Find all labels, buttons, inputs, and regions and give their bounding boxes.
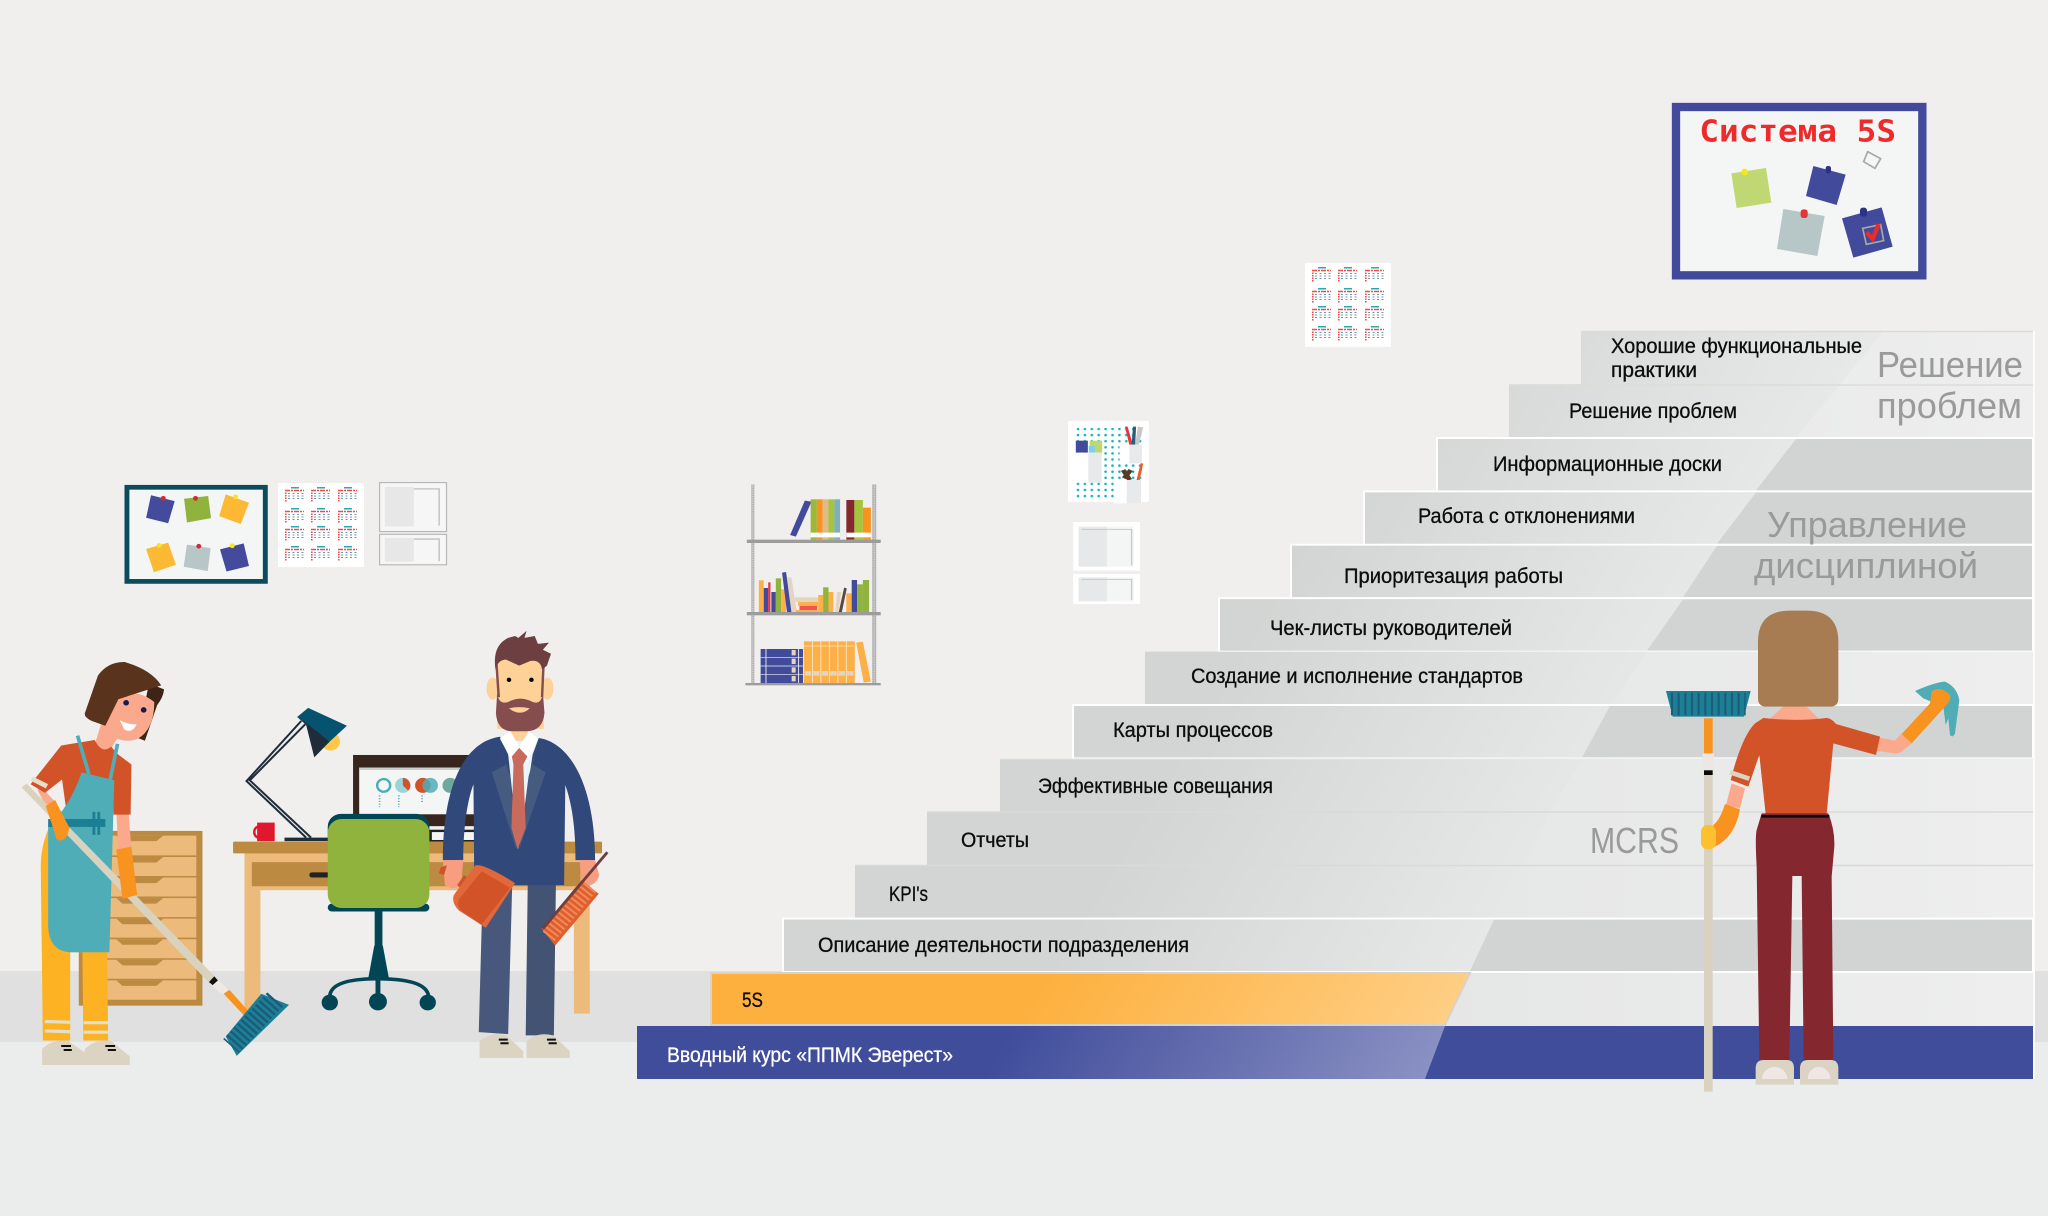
note: blue — [1806, 166, 1846, 205]
step: Работа с отклонениями — [1364, 491, 2033, 545]
right arm — [1877, 733, 1912, 753]
jacket — [443, 737, 595, 885]
legs — [479, 883, 512, 1034]
shoes — [1756, 1060, 1794, 1085]
lapels — [492, 744, 516, 849]
organizer with pens — [1068, 421, 1149, 503]
step: Эффективные совещания — [1000, 758, 2033, 812]
step: Приоритезация работы — [1291, 545, 2033, 598]
broom head — [226, 994, 289, 1056]
step: Создание и исполнение стандартов: Создание и исполнение стандартов — [1191, 665, 1523, 688]
step: 5S — [711, 973, 2033, 1026]
beard — [496, 693, 544, 731]
label: Решение проблем — [1877, 344, 2023, 426]
empty checkbox — [1864, 152, 1881, 168]
board title: Система 5S — [1699, 115, 1896, 150]
step: Информационные доски — [1437, 438, 2033, 491]
broom handle — [22, 783, 216, 984]
staircase right edge — [2033, 331, 2035, 1079]
calendar on left wall — [278, 483, 364, 567]
label: Управление дисциплиной: дисциплиной — [1754, 545, 1978, 586]
businessman with dustpan and brush — [439, 631, 607, 1058]
neck — [510, 725, 531, 745]
monitor — [353, 755, 476, 842]
step: Чек-листы руководителей — [1219, 598, 2033, 652]
office chair — [322, 814, 436, 1010]
label: Управление дисциплиной: Управление — [1767, 504, 1967, 545]
hair — [85, 662, 161, 726]
cleaning woman with broom — [22, 662, 289, 1065]
left wall and office scene — [22, 487, 607, 1065]
bottom shelf binders — [761, 641, 871, 683]
neck — [1768, 705, 1820, 720]
staircase of training steps — [637, 331, 2033, 1079]
step: Описание деятельности подразделения — [783, 919, 2033, 972]
mug — [254, 823, 275, 841]
note: grey — [1777, 209, 1825, 256]
step: Карты процессов: Карты процессов — [1113, 719, 1273, 742]
face — [105, 693, 154, 741]
shirt — [31, 740, 131, 818]
woman seen from behind with broom and cloth — [1666, 611, 1959, 1092]
calendar above stairs — [1305, 263, 1391, 347]
top shelf books — [790, 499, 871, 540]
trousers — [41, 828, 108, 1040]
trousers — [1756, 813, 1834, 1060]
step: Отчеты — [927, 812, 2033, 865]
step: KPI's — [855, 865, 2033, 919]
shoes — [480, 1034, 570, 1058]
left arm — [1726, 783, 1745, 808]
step: Чек-листы руководителей: Чек-листы руководителей — [1270, 617, 1512, 640]
torso — [1731, 718, 1880, 814]
ears — [487, 677, 499, 700]
desk — [233, 842, 602, 1014]
step: Решение проблем — [1509, 384, 2033, 438]
label: Управление дисциплиной — [1754, 504, 1978, 586]
step: Решение проблем: Решение проблем — [1569, 400, 1737, 423]
bookshelf — [745, 484, 881, 685]
hand brush — [542, 880, 599, 946]
tie — [511, 748, 527, 849]
step: Информационные доски: Информационные доски — [1493, 453, 1722, 476]
label: Решение проблем: проблем — [1877, 385, 2022, 426]
step: Карты процессов — [1073, 705, 2033, 758]
board: Система 5S — [1676, 107, 1922, 275]
pin board with six notes — [127, 487, 265, 581]
step: KPI's: KPI's — [889, 883, 928, 906]
step: Вводный курс: Вводный курс «ППМК Эверест» — [667, 1044, 953, 1067]
step: Создание и исполнение стандартов — [1145, 652, 2033, 705]
step: Хорошие функциональные практики — [1581, 331, 2033, 384]
floor foreground — [0, 1042, 2048, 1216]
step: Работа с отклонениями: Работа с отклонениями — [1418, 505, 1635, 528]
hair back — [138, 683, 164, 741]
binder frames in centre — [1073, 522, 1140, 604]
step: Отчеты: Отчеты — [961, 829, 1029, 852]
note: green — [1731, 168, 1771, 208]
shoes — [42, 1040, 130, 1065]
hair — [495, 631, 551, 670]
step: 5S: 5S — [742, 989, 763, 1012]
hair — [1758, 611, 1838, 707]
label: MCRS: MCRS — [1590, 820, 1679, 861]
step: Вводный курс — [637, 1026, 2033, 1079]
apron — [48, 772, 114, 952]
desk lamp — [247, 708, 347, 841]
note: blue with checkbox — [1842, 207, 1893, 258]
binder frames on left wall — [380, 483, 447, 565]
broom pole — [1704, 770, 1713, 1092]
label: Решение проблем: Решение — [1877, 344, 2023, 385]
hands — [443, 860, 463, 888]
gloves — [46, 800, 69, 841]
step: Эффективные совещания: Эффективные совещания — [1038, 775, 1273, 798]
shirt and collar — [506, 741, 536, 820]
face — [497, 658, 544, 729]
cabinet with drawers — [79, 831, 202, 1006]
step: Приоритезация работы: Приоритезация работы — [1344, 565, 1563, 588]
step: Хорошие функциональные практики: Хорошие функциональные — [1611, 335, 1862, 358]
step: Описание деятельности подразделения: Описание деятельности подразделения — [818, 934, 1189, 957]
dustpan — [439, 865, 469, 889]
middle shelf books — [759, 572, 869, 612]
floor band — [0, 971, 2048, 1042]
broom head — [1666, 691, 1751, 717]
cloth — [1915, 682, 1959, 736]
neck and arm — [95, 721, 118, 751]
step: Хорошие функциональные практики: практики — [1611, 359, 1697, 382]
